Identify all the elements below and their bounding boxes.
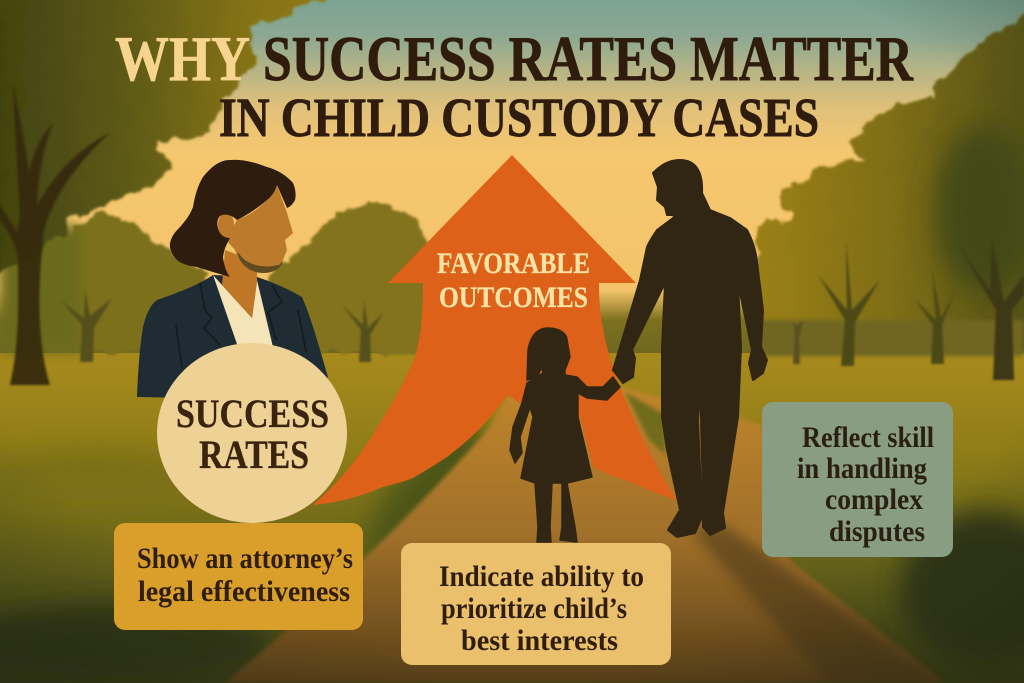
neck and face [222,250,257,318]
figure: father silhouette [613,160,767,537]
trees: right group [757,0,1024,380]
callout: complex disputes [762,402,953,557]
arrow label: OUTCOMES [439,281,588,314]
jacket [137,275,328,400]
blouse [213,275,273,347]
circle label: SUCCESS [176,391,329,436]
arrow: favorable outcomes [313,155,677,505]
callout: legal effectiveness: legal effectiveness [138,575,350,608]
ear [218,212,234,238]
callout circle: success rates [157,343,347,523]
callout: child's best interests: prioritize child’s [441,592,627,625]
title [115,23,914,148]
jaw shadow [238,253,282,273]
callout: complex disputes: disputes [829,515,925,548]
figure: attorney woman [137,160,328,400]
hair [170,160,296,277]
arrow label: FAVORABLE [437,247,590,280]
callout: child's best interests: Indicate ability to [439,560,644,593]
circle label: RATES [199,432,309,477]
title line 2: IN CHILD CUSTODY CASES [219,87,819,148]
callout: complex disputes: in handling [797,452,927,485]
callout: legal effectiveness [114,523,363,630]
callout: child's best interests: best interests [461,624,618,657]
title line 1: WHY [115,23,250,94]
callout: legal effectiveness: Show an attorney’s [137,542,353,575]
figure: child silhouette [510,328,620,542]
trees: left group [0,0,340,385]
callout: child's best interests [401,543,671,665]
callout: complex disputes: complex [825,483,923,516]
callout: complex disputes: Reflect skill [802,421,934,454]
trees: centre-left tree [267,202,430,362]
